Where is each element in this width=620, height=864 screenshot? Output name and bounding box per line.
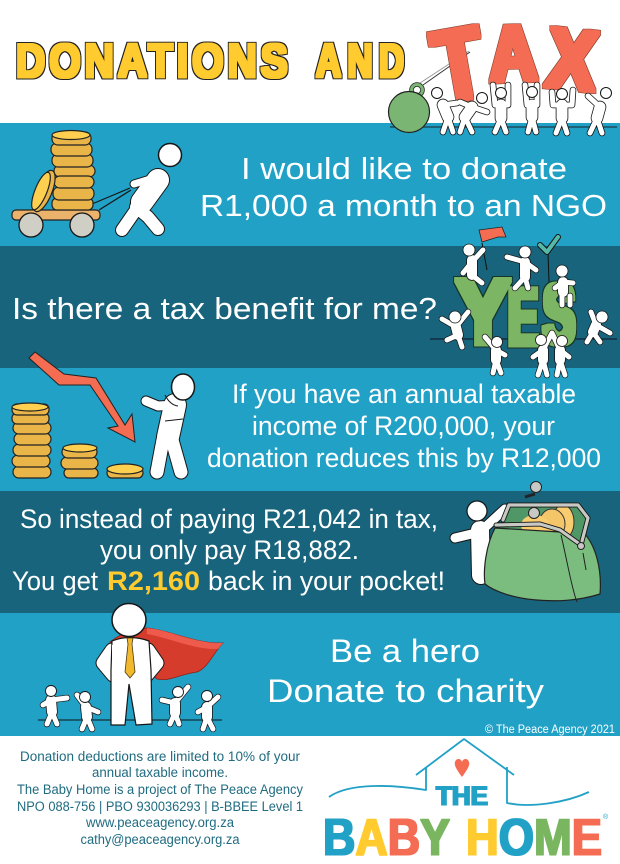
text: question: Is there a tax benefit for me? bbox=[12, 291, 437, 326]
band: tax benefit bbox=[0, 246, 620, 368]
text: savings: you only pay R18,882. bbox=[100, 535, 359, 565]
band: income bbox=[0, 368, 620, 491]
text: income: donation reduces this by R12,000 bbox=[207, 443, 601, 473]
text: call to action: Donate to charity bbox=[267, 673, 544, 709]
text: intro: I would like to donate bbox=[241, 151, 567, 186]
band: savings bbox=[0, 491, 620, 613]
illustration: YES with people: S bbox=[543, 268, 575, 361]
footer text: Donation deductions are limited to 10% of your bbox=[20, 749, 300, 764]
text: income: If you have an annual taxable bbox=[232, 379, 576, 409]
illustration: falling arrow, coins and worried person bbox=[12, 352, 194, 478]
logo: The Baby Home: ® bbox=[603, 813, 609, 821]
text: savings: So instead of paying R21,042 in tax, bbox=[20, 504, 438, 534]
illustration: pulling coin cart bbox=[12, 130, 182, 237]
logo: The Baby Home bbox=[323, 739, 609, 864]
illustration: superhero and small people bbox=[38, 604, 223, 729]
logo: The Baby Home: THE bbox=[436, 781, 488, 811]
illustration: YES with people: Y bbox=[456, 259, 510, 364]
text: intro: R1,000 a month to an NGO bbox=[200, 188, 607, 223]
illustration: people lifting TAX: T bbox=[425, 5, 493, 125]
footer text: The Baby Home is a project of The Peace Agency bbox=[17, 782, 303, 797]
text: income: income of R200,000, your bbox=[252, 411, 555, 441]
illustration: YES with people bbox=[430, 227, 617, 375]
text: call to action bbox=[267, 633, 544, 709]
footer text: cathy@peaceagency.org.za bbox=[80, 832, 240, 847]
highlight amount: R2,160 bbox=[107, 566, 200, 596]
illustration: people lifting TAX: A bbox=[488, 8, 538, 99]
text: savings: back in your pocket! bbox=[208, 566, 445, 596]
band: hero bbox=[0, 613, 620, 736]
footer text: NPO 088-756 | PBO 930036293 | B-BBEE Level 1 bbox=[17, 799, 303, 814]
copyright: © The Peace Agency 2021 bbox=[485, 724, 615, 736]
illustration: people lifting TAX bbox=[388, 5, 617, 133]
title: DONATIONS bbox=[16, 35, 288, 88]
illustration: people lifting TAX: X bbox=[543, 9, 602, 110]
text: intro bbox=[200, 151, 607, 223]
illustration: person opening purse bbox=[455, 482, 600, 602]
illustration: YES with people: E bbox=[508, 270, 538, 362]
title bbox=[16, 35, 404, 88]
text: income bbox=[207, 379, 601, 473]
text: savings: You get bbox=[12, 566, 98, 596]
band: intro bbox=[0, 123, 620, 246]
text: savings bbox=[12, 504, 445, 596]
footer text: www.peaceagency.org.za bbox=[85, 815, 234, 830]
footer text bbox=[17, 749, 303, 847]
title: AND bbox=[316, 35, 404, 87]
footer text: annual taxable income. bbox=[92, 765, 228, 780]
text: call to action: Be a hero bbox=[330, 633, 480, 669]
